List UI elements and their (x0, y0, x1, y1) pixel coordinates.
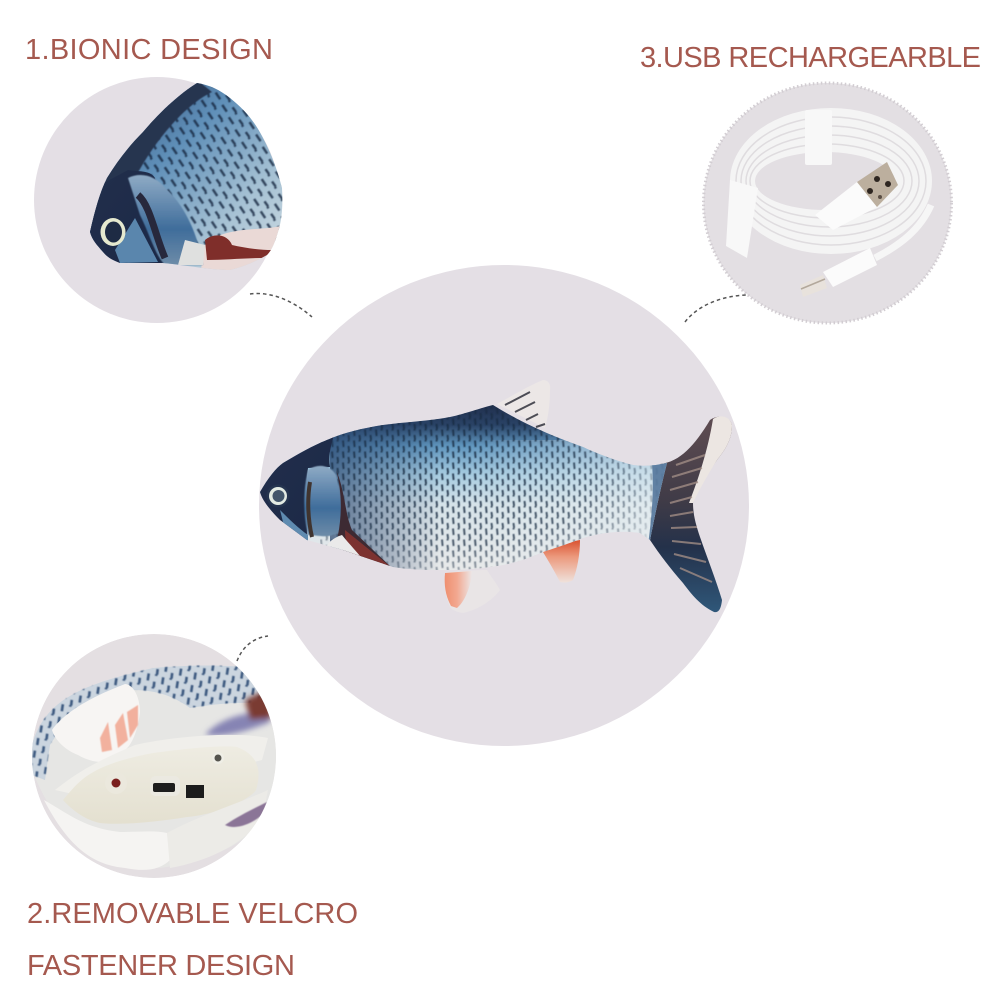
gill edge and red mark (336, 470, 392, 568)
dark back band (85, 80, 212, 240)
panel: bionic design circle (34, 77, 280, 323)
dorsal fin (497, 380, 550, 428)
tail band (648, 463, 667, 540)
panel: central fish circle (259, 265, 749, 746)
usb port (150, 783, 180, 796)
red stripe (205, 235, 272, 260)
micro-usb plug (800, 248, 877, 297)
pelvic fin (445, 570, 500, 613)
eye: close-up (100, 218, 126, 246)
anal fin (543, 540, 580, 583)
connector: velcro to fish (237, 636, 268, 661)
panel: usb cable circle (704, 83, 952, 323)
screw (214, 754, 222, 762)
heading: bionic design: 1.BIONIC DESIGN (25, 34, 273, 66)
velcro flap bottom (44, 800, 267, 870)
belly (201, 226, 280, 270)
fleece band above box (56, 734, 268, 793)
coil (730, 108, 932, 254)
head (260, 437, 334, 540)
heading: removable velcro fastener design: 2.REMOVABLE VELCRO (27, 898, 358, 930)
usb-a plug (815, 162, 898, 230)
head (90, 171, 164, 264)
connector: bionic design to fish (250, 294, 312, 317)
scale band (32, 666, 270, 780)
fish body (245, 722, 276, 837)
heading: usb rechargeable: 3.USB RECHARGEARBLE (640, 42, 981, 74)
illustration: main fish (255, 380, 732, 613)
connector: usb cable to fish (685, 295, 746, 322)
illustration: fish head close-up (85, 80, 285, 275)
cable tie left (726, 180, 758, 258)
tail fin (650, 416, 732, 612)
red and purple streak (205, 688, 272, 736)
heading: removable velcro fastener design: FASTENER DESIGN (27, 950, 295, 982)
illustration: usb cable coil (726, 108, 932, 297)
cable tail (875, 205, 931, 258)
eye (266, 484, 290, 508)
power indicator (112, 778, 120, 788)
switch (186, 785, 204, 798)
velcro flap top (52, 684, 140, 762)
gill cover (304, 466, 341, 536)
panel: velcro pocket close-up (32, 634, 281, 878)
heading: removable velcro fastener design (27, 898, 358, 982)
cable tie top (805, 110, 832, 165)
gill (128, 175, 203, 265)
electronics box (63, 746, 259, 824)
fish body (255, 403, 680, 575)
